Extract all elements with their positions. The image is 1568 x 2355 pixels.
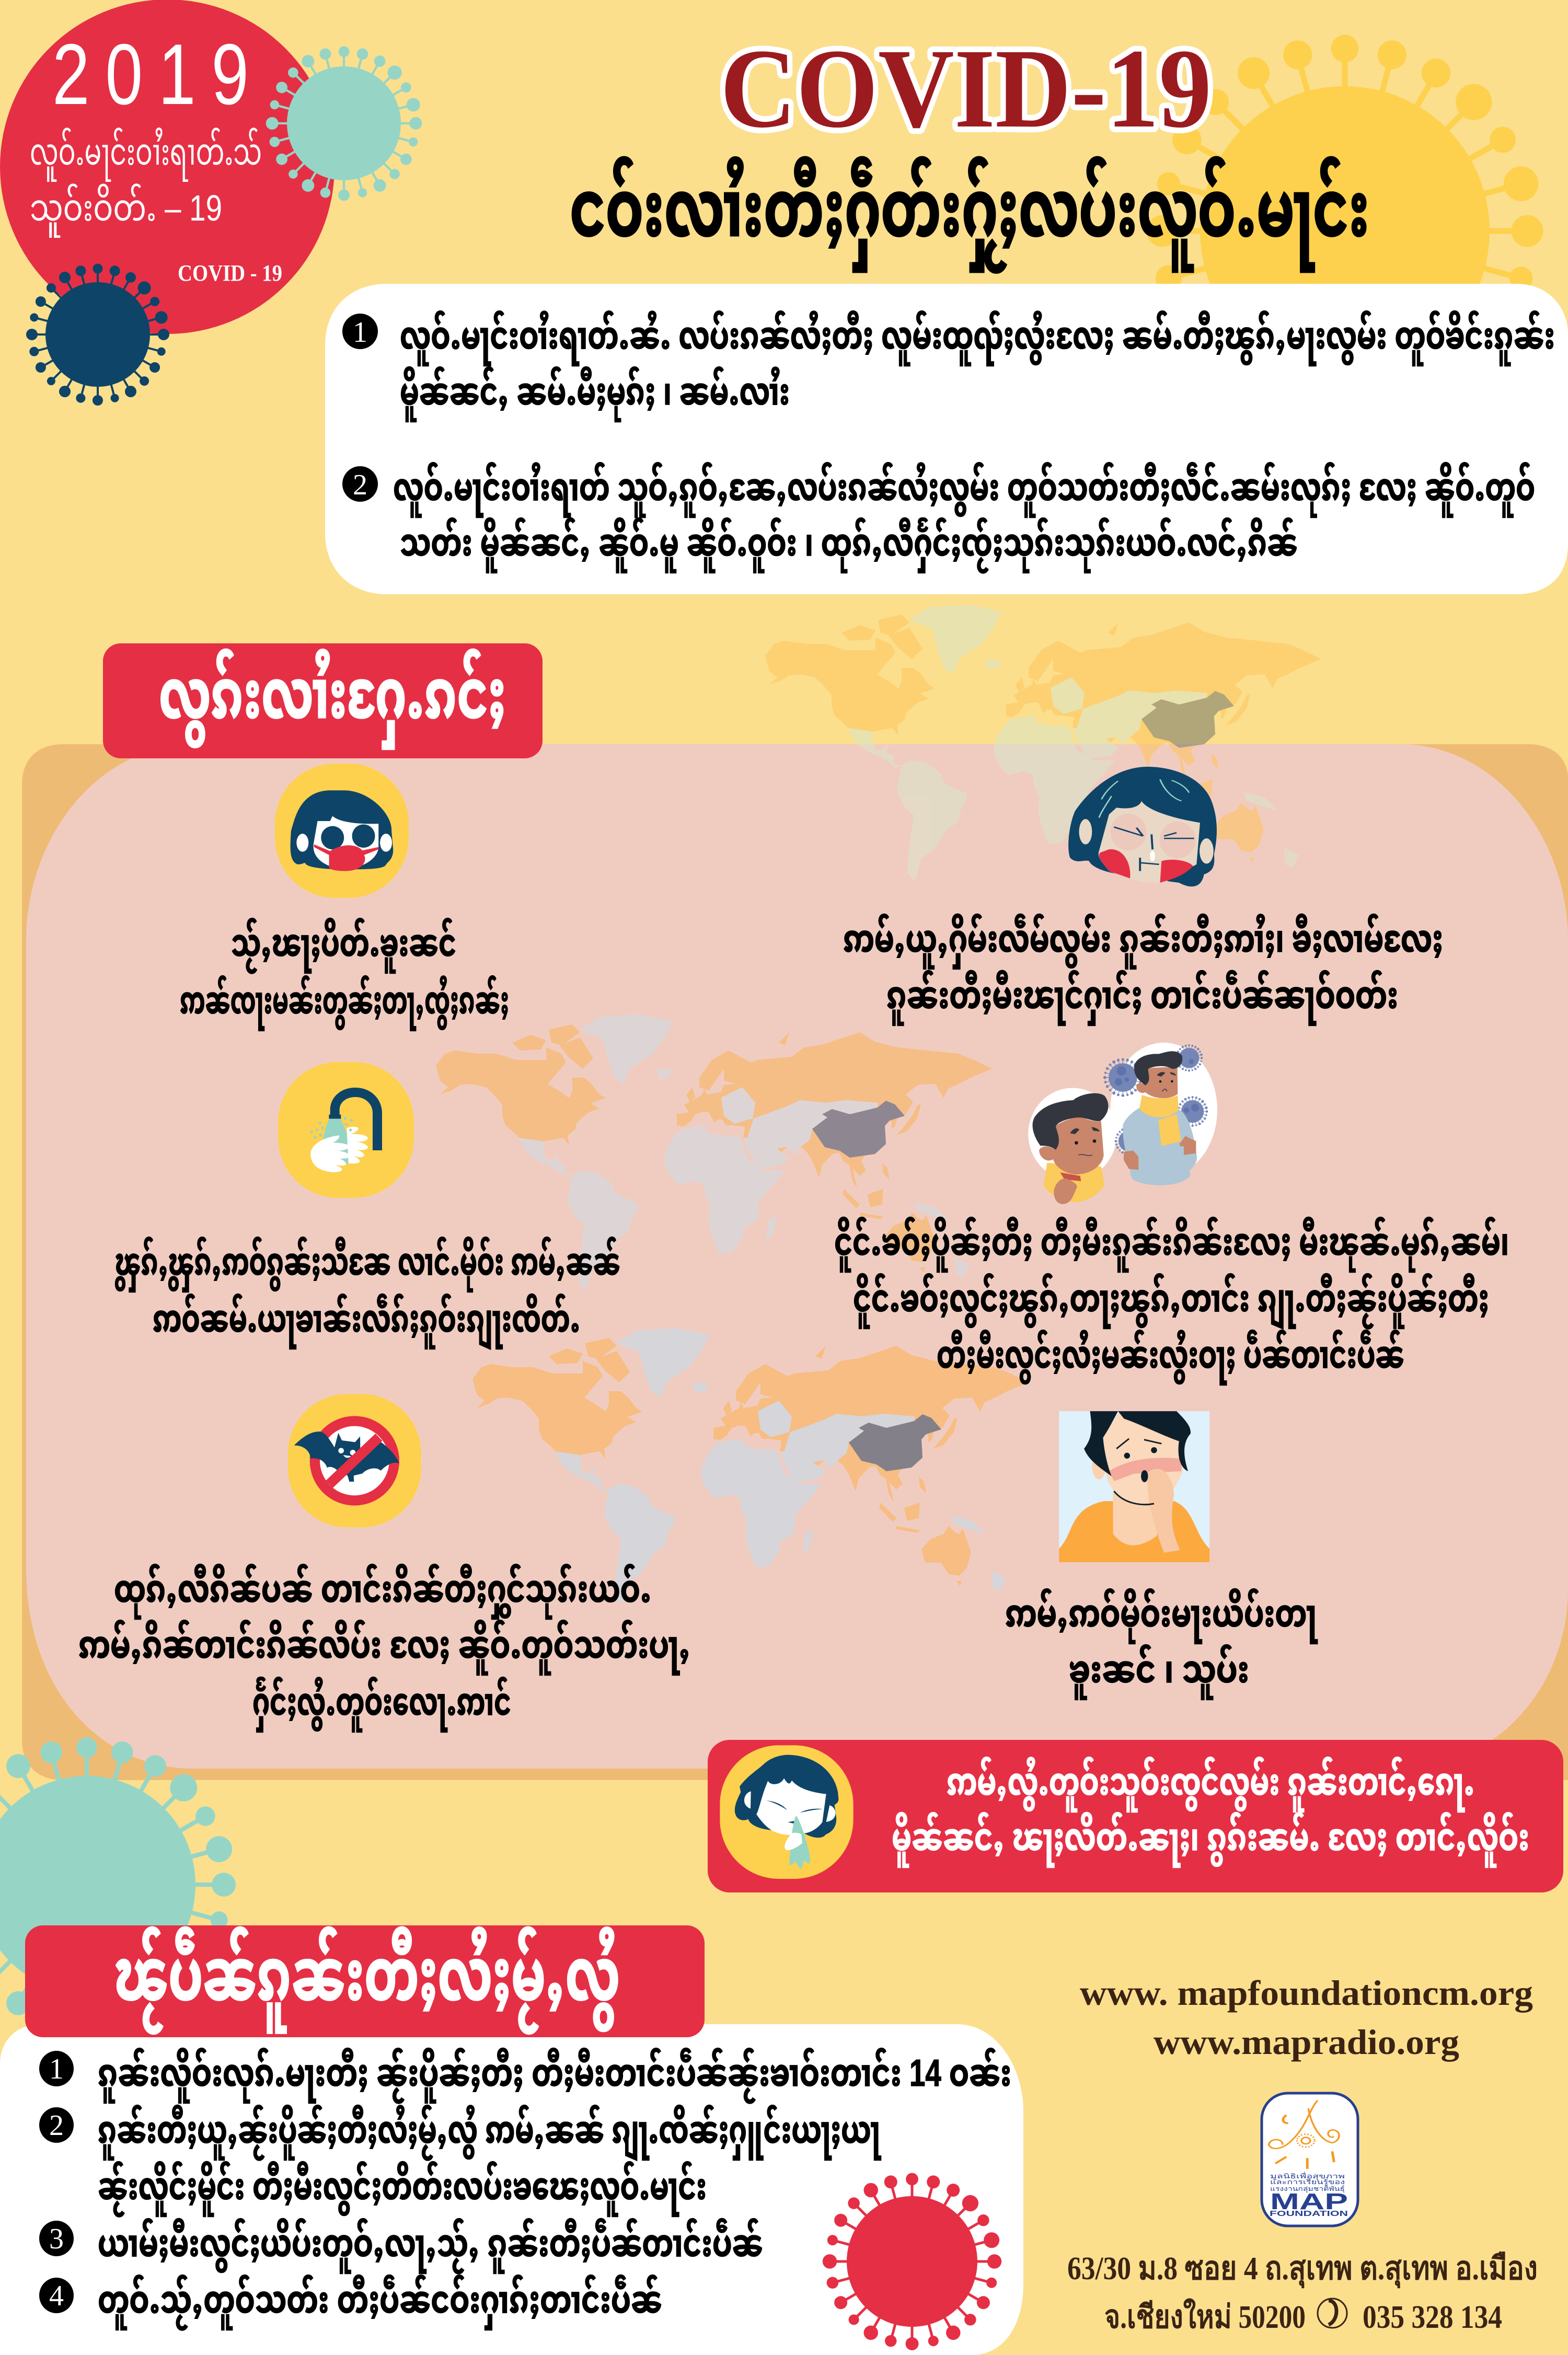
risk line 2: ၵူၼ်းတီႈယူႇၼႂ်းပိူၼ်ႈတီႈလႆႈမႂ်ႇလွႆ ဢမ်ႇၼၼ် ၵျႃႉၸိၼ်ႈႁူင်းယႃႈယႃ xyxy=(98,2105,881,2161)
left tip 3 line 1: ထုၵ်ႇလီၵိၼ်ပၼ် တၢင်းၵိၼ်တီႈႁွင်သုၵ်းယဝ်ႉ xyxy=(114,1564,651,1620)
title: COVID-19 xyxy=(720,26,1212,151)
website 2: www.mapradio.org xyxy=(1154,2022,1459,2062)
bullet 4: 4 xyxy=(49,2280,64,2312)
left tip 1 line 2: ဢၼ်ၸႃးမၼ်းတွၼ်ႈတႃႇၸွႆႈၵၼ်ႈ xyxy=(180,975,509,1031)
bullet 1 xyxy=(39,2051,74,2086)
risk line 2 continued: ၼႂ်းလိူင်ႈမိူင်း တီႈမီးလွင်ႈတိတ်းလပ်းၶၽေႈလူဝ်ႉမႃင်း xyxy=(98,2161,707,2217)
world map top xyxy=(765,605,1321,880)
icon: big teal virus xyxy=(0,1737,236,2033)
bullet 1 xyxy=(342,314,378,349)
world map middle xyxy=(436,1014,992,1290)
badge label: COVID - 19 xyxy=(178,260,282,286)
logo: MAP Foundation: MAP xyxy=(1270,2189,1348,2214)
logo: MAP Foundation: แรงงานกลุ่มชาติพันธุ์ xyxy=(1270,2185,1345,2193)
icon: woman with tissue xyxy=(720,1745,854,1879)
world map lower xyxy=(472,1328,1029,1603)
left tip 3 line 2: ဢမ်ႇၵိၼ်တၢင်းၵိၼ်လိပ်း လႄႈ ၼိူဝ်ႉတူဝ်သတ်းပႃႇ xyxy=(78,1620,690,1676)
panel: pink prevention area xyxy=(26,744,1568,1769)
panel: orange backing xyxy=(22,744,1568,1780)
bullet 3: 3 xyxy=(49,2223,64,2255)
icon: sick men xyxy=(1028,1043,1217,1204)
panel: risk groups xyxy=(0,2024,1023,2355)
heading: who is at risk: ၽႂ်ပဵၼ်ၵူၼ်းတီႈလႆႈမႂ်ႇလွႆ xyxy=(114,1926,620,2034)
left tip 3 line 3: ႁႅင်ႈလွႆႉတူဝ်းလေႃႉဢၢင် xyxy=(252,1677,511,1733)
badge text line 1: လူဝ်ႉမႃင်းဝၢႆးရၢတ်ႉသ် xyxy=(30,128,262,181)
year: 2019 xyxy=(52,27,249,123)
bullet 2 xyxy=(342,466,378,502)
heading: prevention: လွၵ်းလၢႆးႁႄႉၵင်ႈ xyxy=(159,649,506,749)
icon: red virus xyxy=(823,2173,1001,2350)
logo: MAP Foundation: และการเรียนรู้ของ xyxy=(1270,2178,1345,2186)
logo: MAP Foundation xyxy=(1262,2093,1358,2226)
icon: phone xyxy=(1318,2299,1347,2328)
big yellow virus xyxy=(1147,35,1543,428)
phone number: 035 328 134 xyxy=(1363,2300,1502,2335)
risk line 3: ယၢမ်ႈမီးလွင်ႈယိပ်းတူဝ်ႇလႃႇသႂ်ႇ ၵူၼ်းတီႈပဵၼ်တၢင်းပဵၼ် xyxy=(98,2218,763,2274)
icon: woman touching face xyxy=(1059,1411,1209,1562)
risk line 1: ၵူၼ်းလိူဝ်းလုၵ်ႉမႃးတီႈ ၼႂ်းပိူၼ်ႈတီႈ တီႈမီးတၢင်းပဵၼ်ၼႂ်းၶၢဝ်းတၢင်း 14 ဝၼ်း xyxy=(98,2048,1011,2104)
heading: prevention xyxy=(103,643,543,758)
note 1 line 2: မိူၼ်ၼင်ႇ ၼမ်ႉမီႈမုၵ်ႈ ၊ ၼမ်ႉလၢႆး xyxy=(400,366,790,422)
bullet 2 xyxy=(39,2107,74,2143)
icon: navy virus xyxy=(26,263,169,406)
risk line 4: တူဝ်ႉသႂ်ႇတူဝ်သတ်း တီႈပဵၼ်ငဝ်းႁၢၵ်ႈတၢင်းပဵၼ် xyxy=(98,2275,662,2330)
heading: who is at risk xyxy=(25,1925,705,2037)
bullet 1: 1 xyxy=(353,316,367,349)
icon: face with mask xyxy=(275,764,409,898)
website 1: www. mapfoundationcm.org xyxy=(1080,1973,1533,2013)
logo: MAP Foundation: มูลนิธิเพื่อสุขภาพ xyxy=(1270,2172,1345,2180)
address line 2: จ.เชียงใหม่ 50200 xyxy=(1104,2298,1306,2335)
bullet 3 xyxy=(39,2221,74,2256)
right tip 3 line 2: ၶူးၼင် ၊ သူပ်း xyxy=(1069,1644,1249,1700)
right tip 3 line 1: ဢမ်ႇဢဝ်မိုဝ်းမႃးယိပ်းတႃ xyxy=(1005,1588,1318,1644)
bullet 2: 2 xyxy=(353,469,367,501)
left tip 2 line 2: ဢဝ်ၼမ်ႉယႃၶၢၼ်းလဵၵ်ႈၵူဝ်းၵျႃးၸိတ်ႉ xyxy=(153,1294,580,1350)
logo: MAP Foundation: FOUNDATION xyxy=(1270,2209,1348,2218)
icon: teal virus xyxy=(266,46,422,201)
bullet 4 xyxy=(39,2278,74,2313)
right tip 1 line 2: ၵူၼ်းတီႈမီးၽႃင်ႁၢင်ႈ တၢင်းပဵၼ်ၼႃဝ်ဝတ်း xyxy=(886,970,1398,1026)
panel: transmission notes xyxy=(325,284,1568,594)
left tip 1 line 1: သႂ်ႇၽႃႈပိတ်ႉၶူးၼင် xyxy=(231,918,456,974)
bullet 1: 1 xyxy=(49,2053,64,2085)
icon: sneezing woman xyxy=(1068,767,1217,886)
icon: hand washing xyxy=(278,1062,414,1198)
badge text line 2: သူဝ်းဝိတ်ႉ – 19 xyxy=(30,184,222,237)
bullet 2: 2 xyxy=(49,2109,64,2142)
icon: no bats xyxy=(288,1394,421,1527)
callout banner xyxy=(708,1740,1563,1892)
left tip 2 line 1: ၾွၵ်ႇၾွၵ်ႇဢဝ်ၵွၼ်ႈသီၼႄ လၢင်ႉမိုဝ်း ဢမ်ႇၼၼ် xyxy=(115,1237,620,1292)
red circle badge xyxy=(0,0,335,334)
